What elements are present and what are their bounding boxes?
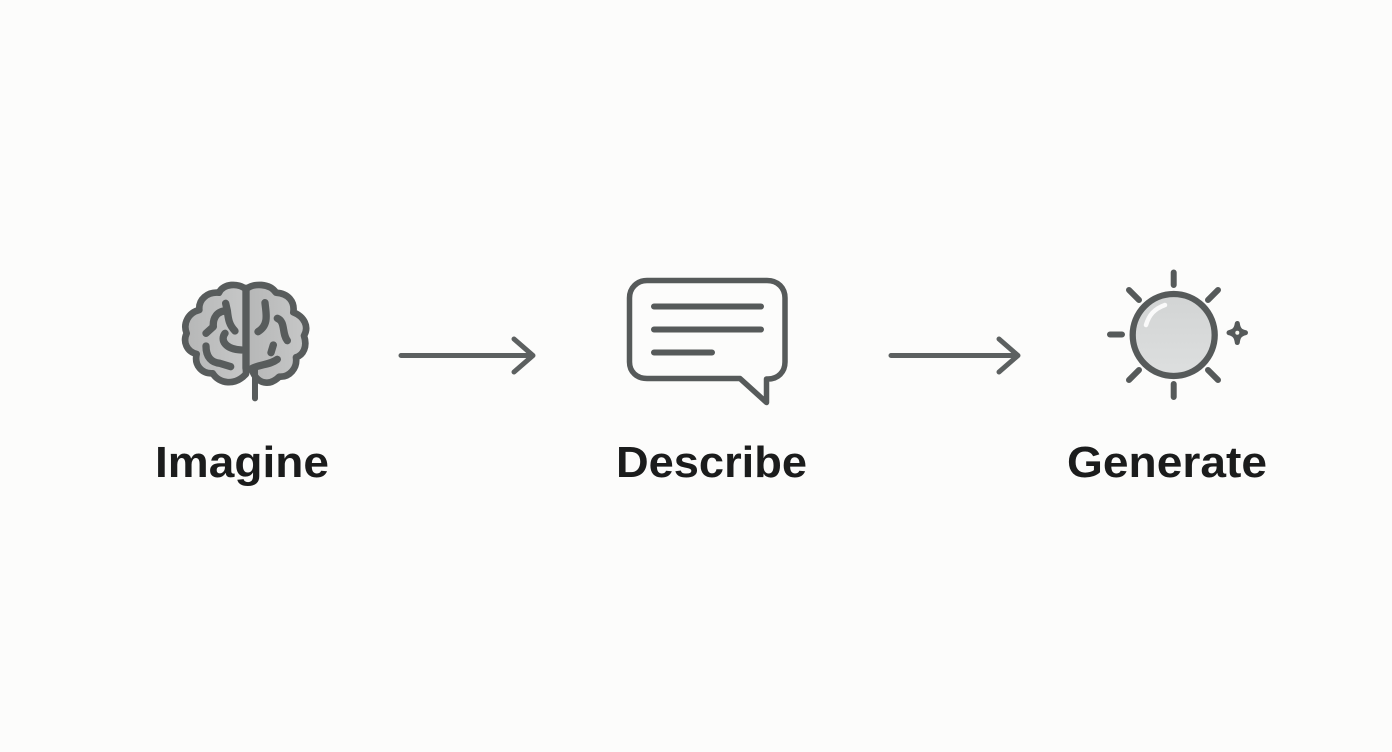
bubble outline	[630, 280, 785, 402]
icon: speech bubble	[630, 280, 785, 402]
arrow: imagine to describe	[401, 339, 533, 372]
disc highlight	[1146, 305, 1165, 325]
label: Imagine: Imagine	[155, 438, 329, 487]
label: Describe: Describe	[616, 438, 807, 487]
arrow: describe to generate	[891, 339, 1018, 372]
icon: brain	[185, 285, 306, 398]
text lines	[654, 306, 761, 352]
label: Generate: Generate	[1067, 438, 1267, 487]
icon: sun with sparkle	[1110, 272, 1246, 397]
sparkle	[1229, 324, 1246, 342]
sun rays	[1110, 272, 1218, 397]
sun disc	[1133, 294, 1215, 376]
